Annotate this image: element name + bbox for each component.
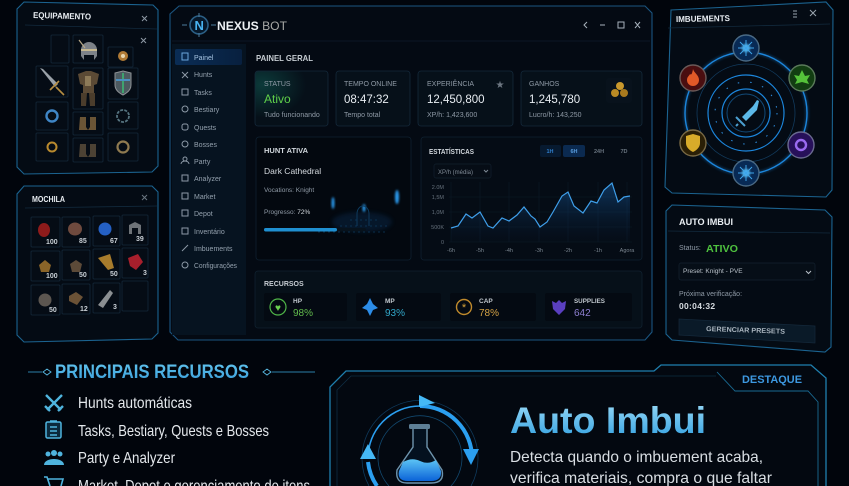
card: experiencia: 12,450,800 bbox=[427, 94, 485, 106]
panel: hunt ativa: HUNT ATIVA bbox=[264, 146, 309, 155]
icon: boots bbox=[79, 117, 96, 130]
item quantities: 67 bbox=[110, 238, 118, 245]
item quantities: 100 bbox=[46, 273, 58, 280]
item quantities: 3 bbox=[113, 304, 117, 311]
nav labels: Inventário bbox=[194, 229, 225, 236]
panel: imbuements bbox=[665, 2, 833, 197]
panel: hunt ativa: Vocations: Knight bbox=[264, 187, 314, 194]
nav labels: Party bbox=[194, 159, 211, 166]
node: fire bbox=[680, 65, 706, 91]
resource: cap: * bbox=[462, 302, 467, 314]
panel: auto imbui bbox=[666, 205, 832, 352]
nav labels: Bestiary bbox=[194, 107, 220, 114]
dropdown bbox=[434, 164, 491, 178]
panel: estatisticas: ESTATÍSTICAS bbox=[429, 147, 474, 156]
icon: blue ring bbox=[46, 110, 58, 122]
panel: recursos: RECURSOS bbox=[264, 281, 304, 288]
nav labels: Painel bbox=[194, 55, 214, 62]
icon: nexus logo bbox=[182, 13, 216, 37]
window controls bbox=[584, 22, 640, 28]
equipment slots bbox=[36, 35, 138, 162]
line chart: -2h bbox=[564, 248, 572, 254]
panel: recursos bbox=[255, 271, 642, 328]
card: ganhos: 1,245,780 bbox=[529, 94, 580, 106]
line chart: -3h bbox=[535, 248, 543, 254]
card: status: STATUS bbox=[264, 81, 291, 88]
heading: imbuements: IMBUEMENTS bbox=[676, 13, 730, 24]
icon: sword bbox=[40, 68, 64, 95]
item quantities bbox=[46, 236, 147, 314]
text: tasks: Tasks, Bestiary, Quests e Bosses bbox=[78, 423, 269, 440]
card: ganhos bbox=[521, 71, 642, 126]
line chart: 1,0M bbox=[432, 210, 444, 216]
panel: hunt ativa bbox=[256, 137, 411, 260]
resource: cap: 78% bbox=[479, 308, 499, 319]
icon: clipboard bbox=[46, 421, 61, 438]
resource: hp: HP bbox=[293, 298, 303, 305]
heading: mochila: MOCHILA bbox=[32, 195, 65, 204]
nav labels: Imbuements bbox=[194, 246, 233, 253]
line chart: 2.0M bbox=[432, 185, 444, 191]
line chart: -5h bbox=[476, 248, 484, 254]
description bbox=[510, 449, 773, 486]
resource: mp: MP bbox=[385, 298, 395, 305]
icon: cart bbox=[44, 477, 63, 486]
nav labels bbox=[194, 55, 237, 270]
progress bar bbox=[264, 228, 366, 232]
card: ganhos: Lucro/h: 143,250 bbox=[529, 112, 582, 119]
line chart bbox=[431, 182, 635, 254]
line chart: 1,5M bbox=[432, 195, 444, 201]
icon: central sword bbox=[736, 100, 759, 126]
status: ATIVO bbox=[706, 243, 738, 255]
card: status bbox=[255, 71, 328, 126]
time range tabs: 1H bbox=[546, 149, 554, 155]
resource: cap bbox=[450, 293, 536, 321]
panel: hunt ativa: Dark Cathedral bbox=[264, 166, 321, 176]
icon: flask with cycle arrows bbox=[360, 395, 479, 486]
dropdown: XP/h (média) bbox=[438, 170, 473, 176]
next check bbox=[679, 291, 742, 311]
line chart: -6h bbox=[447, 248, 455, 254]
card: experiencia: XP/h: 1,423,600 bbox=[427, 112, 477, 119]
nav labels: Hunts bbox=[194, 72, 213, 79]
nav labels: Depot bbox=[194, 211, 213, 218]
item quantities: 3 bbox=[143, 270, 147, 277]
icon: shield bbox=[115, 71, 131, 95]
description: Detecta quando o imbuement acaba, bbox=[510, 449, 763, 466]
panel controls bbox=[793, 10, 816, 17]
card: tempo online: Tempo total bbox=[344, 112, 381, 119]
item quantities: 39 bbox=[136, 236, 144, 243]
card: status: Ativo bbox=[264, 92, 291, 106]
button: gerenciar presets: GERENCIAR PRESETS bbox=[706, 326, 785, 336]
node: shield bbox=[680, 130, 706, 156]
icon: bronze ring bbox=[118, 142, 128, 152]
icon: close bbox=[142, 195, 147, 200]
preset select: Preset: Knight - PVE bbox=[683, 268, 743, 275]
resource: mp bbox=[356, 293, 441, 321]
icon: nexus logo: N bbox=[194, 18, 204, 33]
line chart: -4h bbox=[505, 248, 513, 254]
resource: mp: 93% bbox=[385, 308, 405, 319]
icon: party bbox=[44, 450, 64, 465]
time range tabs: 24H bbox=[594, 149, 604, 155]
nav labels: Market bbox=[194, 194, 215, 201]
status bbox=[679, 243, 738, 255]
text: hunts: Hunts automáticas bbox=[78, 395, 192, 412]
line chart: 500K bbox=[431, 225, 444, 231]
panel: destaque bbox=[329, 364, 827, 486]
line chart: -1h bbox=[594, 248, 602, 254]
icon: crossed swords bbox=[45, 395, 63, 411]
backpack slots bbox=[31, 215, 148, 315]
time range tabs: 7D bbox=[620, 149, 628, 155]
icon: boots dark bbox=[79, 144, 96, 157]
nav labels: Analyzer bbox=[194, 176, 222, 183]
panel: estatisticas bbox=[421, 137, 642, 260]
icon: armor bbox=[78, 71, 99, 106]
dark cathedral illustration bbox=[318, 190, 399, 232]
line chart: Agora bbox=[620, 248, 635, 254]
resource: hp: ♥ bbox=[275, 303, 281, 314]
item quantities: 50 bbox=[110, 271, 118, 278]
resource: supplies bbox=[545, 293, 632, 321]
nav labels: Bosses bbox=[194, 142, 217, 149]
panel: hunt ativa: Progresso: 72% bbox=[264, 209, 310, 216]
nav labels: Configurações bbox=[194, 263, 237, 270]
card: experiencia: ★ bbox=[496, 80, 505, 91]
next check: 00:04:32 bbox=[679, 301, 715, 311]
node: ice bottom bbox=[733, 160, 759, 186]
panel: equipamento bbox=[17, 2, 158, 174]
resource: cap: CAP bbox=[479, 298, 493, 305]
resource: hp bbox=[264, 293, 347, 321]
panel: mochila bbox=[17, 186, 158, 342]
imbuement rings bbox=[685, 52, 807, 174]
node: arcane bbox=[788, 132, 814, 158]
sidebar bbox=[172, 44, 246, 335]
time range tabs: 6H bbox=[570, 149, 578, 155]
icon: gold ring bbox=[48, 142, 56, 152]
resource: supplies: SUPPLIES bbox=[574, 298, 606, 305]
card: status: Tudo funcionando bbox=[264, 112, 320, 119]
icon: amulet bbox=[118, 51, 128, 61]
heading: principais recursos: PRINCIPAIS RECURSOS bbox=[55, 362, 249, 383]
resource: hp: 98% bbox=[293, 308, 313, 319]
active nav item bbox=[175, 49, 242, 65]
item quantities: 85 bbox=[79, 238, 87, 245]
item quantities: 50 bbox=[49, 307, 57, 314]
preset select bbox=[679, 263, 815, 280]
card: tempo online: 08:47:32 bbox=[344, 94, 389, 106]
item quantities: 12 bbox=[80, 306, 88, 313]
badge: destaque: DESTAQUE bbox=[742, 374, 802, 386]
card: tempo online: TEMPO ONLINE bbox=[344, 81, 397, 88]
next check: Próxima verificação: bbox=[679, 291, 742, 298]
item quantities: 100 bbox=[46, 239, 58, 246]
line chart: 0 bbox=[441, 240, 444, 246]
panel: main window bbox=[170, 6, 652, 340]
nav icons bbox=[181, 53, 189, 268]
status: Status: bbox=[679, 245, 701, 252]
icon: silver ring bbox=[117, 110, 129, 122]
resource: supplies: 642 bbox=[574, 308, 591, 319]
backpack items bbox=[38, 222, 143, 308]
heading: equipamento: EQUIPAMENTO bbox=[33, 10, 92, 22]
card: ganhos: GANHOS bbox=[529, 81, 560, 88]
card: experiencia: EXPERIÊNCIA bbox=[427, 79, 474, 88]
title: nexus bot: NEXUS BOT bbox=[217, 19, 288, 33]
icon: helmet bbox=[79, 40, 97, 60]
time range tabs bbox=[540, 145, 628, 157]
node: ice top bbox=[733, 35, 759, 61]
heading: auto imbui: AUTO IMBUI bbox=[679, 217, 733, 227]
item quantities: 50 bbox=[79, 272, 87, 279]
button: gerenciar presets bbox=[679, 319, 815, 343]
icon: close buttons bbox=[141, 16, 147, 43]
node: nature bbox=[789, 65, 815, 91]
card: tempo online bbox=[336, 71, 410, 126]
text: party: Party e Analyzer bbox=[78, 450, 176, 467]
nav labels: Quests bbox=[194, 125, 217, 132]
card: experiencia bbox=[418, 71, 513, 126]
nav labels: Tasks bbox=[194, 90, 212, 97]
heading: painel geral: PAINEL GERAL bbox=[256, 53, 313, 63]
feature list bbox=[44, 394, 310, 486]
icon: gold coins bbox=[606, 78, 632, 103]
title: auto imbui: Auto Imbui bbox=[510, 400, 706, 441]
